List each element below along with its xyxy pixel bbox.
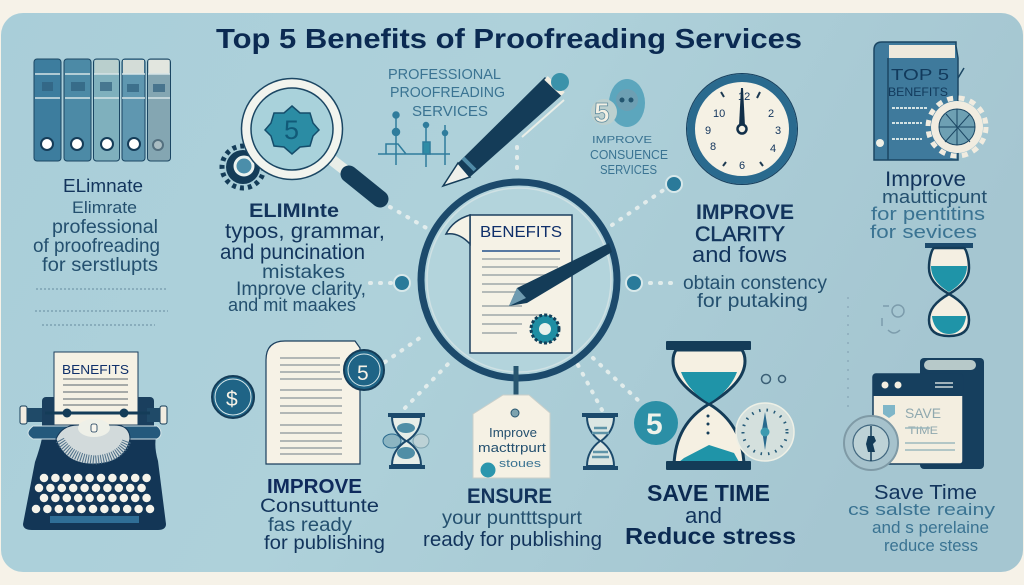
text: save time right column: and s perelaine — [872, 518, 989, 537]
small marker: upper right — [666, 176, 682, 192]
icon: clock: 10 — [713, 108, 725, 120]
icon: book with gear — [874, 42, 986, 160]
badge: 5 on document: 5 — [357, 362, 369, 385]
text: professional proofreading services — [388, 66, 505, 120]
icon: coin — [844, 416, 898, 470]
text: improve consuence services — [590, 135, 668, 177]
icon: pen across ring — [509, 243, 612, 306]
small marker: right of ring — [626, 275, 642, 291]
icon: clock: 3 — [775, 125, 781, 137]
faint dotted text lines — [35, 289, 168, 325]
icon: skull badge with 5: 5 — [594, 97, 610, 128]
icon: binders — [34, 59, 170, 161]
text: save time and reduce stress — [625, 480, 796, 549]
text: improve consuence services: IMPROVE — [592, 135, 652, 146]
text: ensure ready for publishing — [423, 485, 602, 551]
text: left column benefit: of proofreading — [33, 236, 160, 257]
text: left column benefit — [33, 176, 160, 276]
title: Top 5 Benefits of Proofreading Services — [216, 23, 802, 54]
text: improve clarity and flow: CLARITY — [695, 223, 785, 246]
icon: small chart sketch — [378, 112, 450, 167]
text: improve consuence services: SERVICES — [600, 162, 657, 177]
icon: small hourglass left — [383, 413, 429, 469]
icon: browser window: TIME — [908, 425, 938, 437]
icon: hourglass right — [925, 243, 973, 336]
text: improve output: for sevices — [870, 222, 977, 242]
text: improve output — [870, 168, 987, 242]
faint sketch near hourglass — [882, 305, 904, 333]
text: left column benefit: Elimrate — [72, 198, 137, 217]
text: professional proofreading services: SERVICES — [412, 103, 488, 120]
icon: large hourglass — [666, 341, 751, 470]
text: improve clarity and flow: and fows — [692, 242, 787, 267]
dotted connectors — [370, 147, 675, 410]
icon: hanging tag — [473, 366, 550, 478]
text: improve consistency: IMPROVE — [267, 476, 362, 498]
text: improve consistency — [260, 476, 385, 554]
icon: gear on book — [928, 98, 986, 156]
text: professional proofreading services: PROOFREADING — [390, 84, 505, 101]
icon: hanging tag: Improve — [489, 425, 537, 440]
divider dots right — [847, 297, 849, 408]
text: improve output: for pentitins — [871, 204, 985, 224]
icon: book with gear: BENEFITS — [888, 85, 948, 99]
text: improve clarity and flow: IMPROVE — [696, 201, 794, 224]
text: save time right column: cs salste reainy — [848, 500, 996, 519]
icon: hanging tag: stoues — [499, 458, 542, 470]
icon: hanging tag: macttrpurt — [478, 440, 546, 455]
text: save time right column — [848, 482, 996, 555]
badge: 5 teal — [634, 401, 678, 445]
text: improve clarity and flow: for putaking — [697, 291, 808, 312]
icon: fountain pen — [443, 73, 569, 186]
text: improve output: mautticpunt — [882, 187, 987, 207]
badge: dollar — [212, 376, 254, 418]
text: elimination benefit: and mit maakes — [228, 295, 356, 315]
badge: 5 teal: 5 — [646, 408, 663, 441]
icon: skull badge with 5 — [591, 79, 645, 128]
icon: central ring — [421, 182, 617, 378]
text: ensure ready for publishing: ENSURE — [467, 485, 552, 508]
icon: document page — [266, 341, 360, 464]
text: left column benefit: professional — [52, 217, 158, 238]
icon: clock: 4 — [770, 143, 776, 155]
icon: browser window: SAVE — [905, 405, 941, 421]
document: benefits page: BENEFITS — [480, 224, 562, 241]
icon: small hourglass right — [582, 413, 618, 470]
small marker: left of ring — [394, 275, 410, 291]
text: elimination benefit: ELIMInte — [249, 201, 339, 222]
text: save time right column: Save Time — [874, 482, 977, 504]
icon: clock: 2 — [768, 108, 774, 120]
text: improve consistency: Consuttunte — [260, 496, 379, 517]
icon: magnifying glass with badge — [222, 78, 380, 199]
icon: typewriter — [20, 352, 167, 530]
text: improve consistency: fas ready — [268, 515, 353, 536]
icon: clock: 9 — [705, 125, 711, 137]
text: elimination benefit: and puncination — [220, 241, 365, 264]
icon: magnifying glass with badge: 5 — [284, 115, 299, 145]
text: save time and reduce stress: Reduce stress — [625, 523, 796, 549]
text: left column benefit: for serstlupts — [42, 255, 158, 276]
text: improve clarity and flow: obtain constency — [683, 273, 828, 294]
text: ensure ready for publishing: ready for publishing — [423, 529, 602, 551]
text: save time right column: reduce stess — [884, 536, 978, 555]
text: elimination benefit: Improve clarity, — [236, 279, 366, 300]
icon: stopwatch — [736, 403, 794, 461]
text: elimination benefit: typos, grammar, — [225, 220, 385, 243]
text: improve consistency: for publishing — [264, 533, 385, 554]
text: improve output: Improve — [885, 168, 966, 191]
text: left column benefit: ELimnate — [63, 176, 143, 196]
document: benefits page — [446, 215, 572, 353]
icon: gear behind glass — [222, 146, 264, 188]
text: elimination benefit — [220, 201, 385, 315]
badge: dollar: $ — [226, 388, 238, 411]
text: improve consuence services: CONSUENCE — [590, 147, 668, 162]
small circles — [762, 374, 786, 384]
text: save time and reduce stress: SAVE TIME — [647, 480, 770, 506]
icon: clock: 12 — [738, 91, 750, 103]
badge: 5 on document — [344, 350, 384, 390]
text: elimination benefit: mistakes — [262, 262, 345, 283]
text: improve clarity and flow — [683, 201, 828, 312]
text: professional proofreading services: PROFESSIONAL — [388, 66, 501, 83]
paper in typewriter: BENEFITS — [62, 363, 129, 377]
icon: clock — [686, 74, 798, 184]
icon: clock: 6 — [739, 160, 745, 172]
text: save time and reduce stress: and — [685, 503, 722, 528]
icon: clock: 8 — [710, 141, 716, 153]
icon: browser window — [844, 358, 984, 470]
text: ensure ready for publishing: your puntttspurt — [442, 508, 583, 529]
paper in typewriter — [54, 352, 138, 425]
icon: book with gear: TOP 5 — [891, 67, 949, 84]
